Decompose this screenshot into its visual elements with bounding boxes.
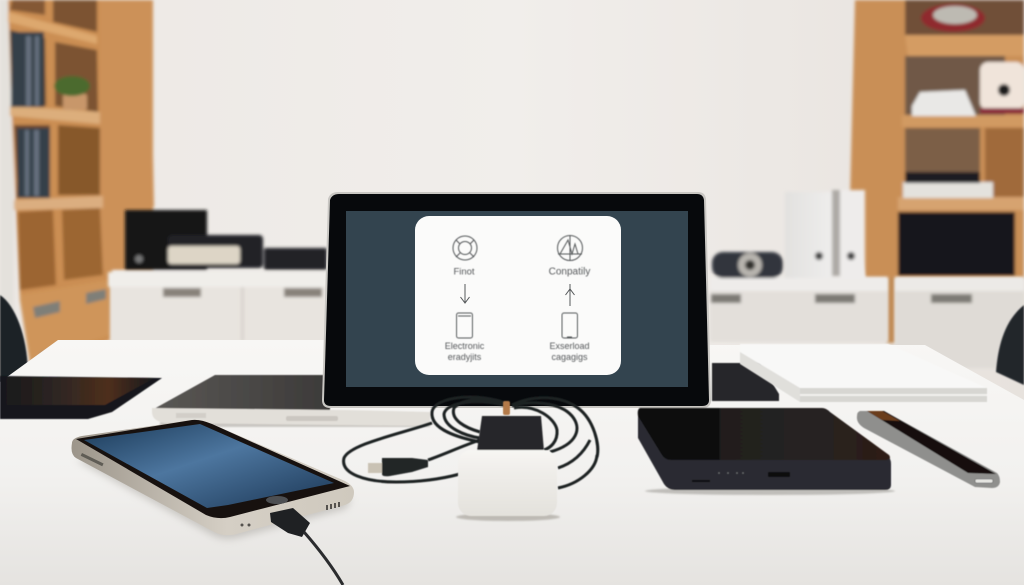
white table <box>0 340 1024 585</box>
icon: ring <box>453 236 477 260</box>
cable bundle <box>344 397 598 488</box>
monitor screen <box>346 211 688 387</box>
shelf cubbies <box>53 0 97 32</box>
label: Exserload: Exserload <box>549 341 590 351</box>
white notebook <box>740 344 987 402</box>
right wooden bookcase <box>850 0 1024 343</box>
arrow: up <box>566 284 574 306</box>
label: cagagigs: cagagigs <box>551 352 588 362</box>
right cabinets with projector and binders <box>710 190 1024 368</box>
left cabinet with electronics <box>108 210 327 342</box>
drawers <box>20 280 110 362</box>
arrow: down <box>460 284 470 303</box>
icon: gauge <box>558 236 582 260</box>
books <box>11 32 44 107</box>
shelves <box>8 12 97 44</box>
shelf items <box>921 4 985 32</box>
smartphone left <box>72 420 354 585</box>
label: Conpatily: Conpatily <box>549 266 590 278</box>
power bank <box>638 408 895 495</box>
icon: tablet <box>456 313 472 338</box>
label: Electronic: Electronic <box>445 341 485 351</box>
chairs <box>0 295 1024 385</box>
usb plug <box>368 458 428 476</box>
charging plug <box>270 508 310 537</box>
power adapter <box>456 416 560 521</box>
label: Finot: Finot <box>453 266 475 278</box>
main monitor <box>322 192 711 408</box>
label: eradyjits: eradyjits <box>448 352 482 362</box>
icon: phone <box>562 313 578 338</box>
compatibility diagram panel <box>415 216 621 375</box>
cable tie <box>503 401 510 415</box>
plant <box>63 94 87 110</box>
left dark tablet <box>0 376 162 419</box>
silver tablet behind monitor <box>152 375 430 427</box>
small phone right <box>857 411 1000 488</box>
dark device behind monitor right <box>712 363 779 401</box>
left wooden bookcase <box>0 0 154 364</box>
